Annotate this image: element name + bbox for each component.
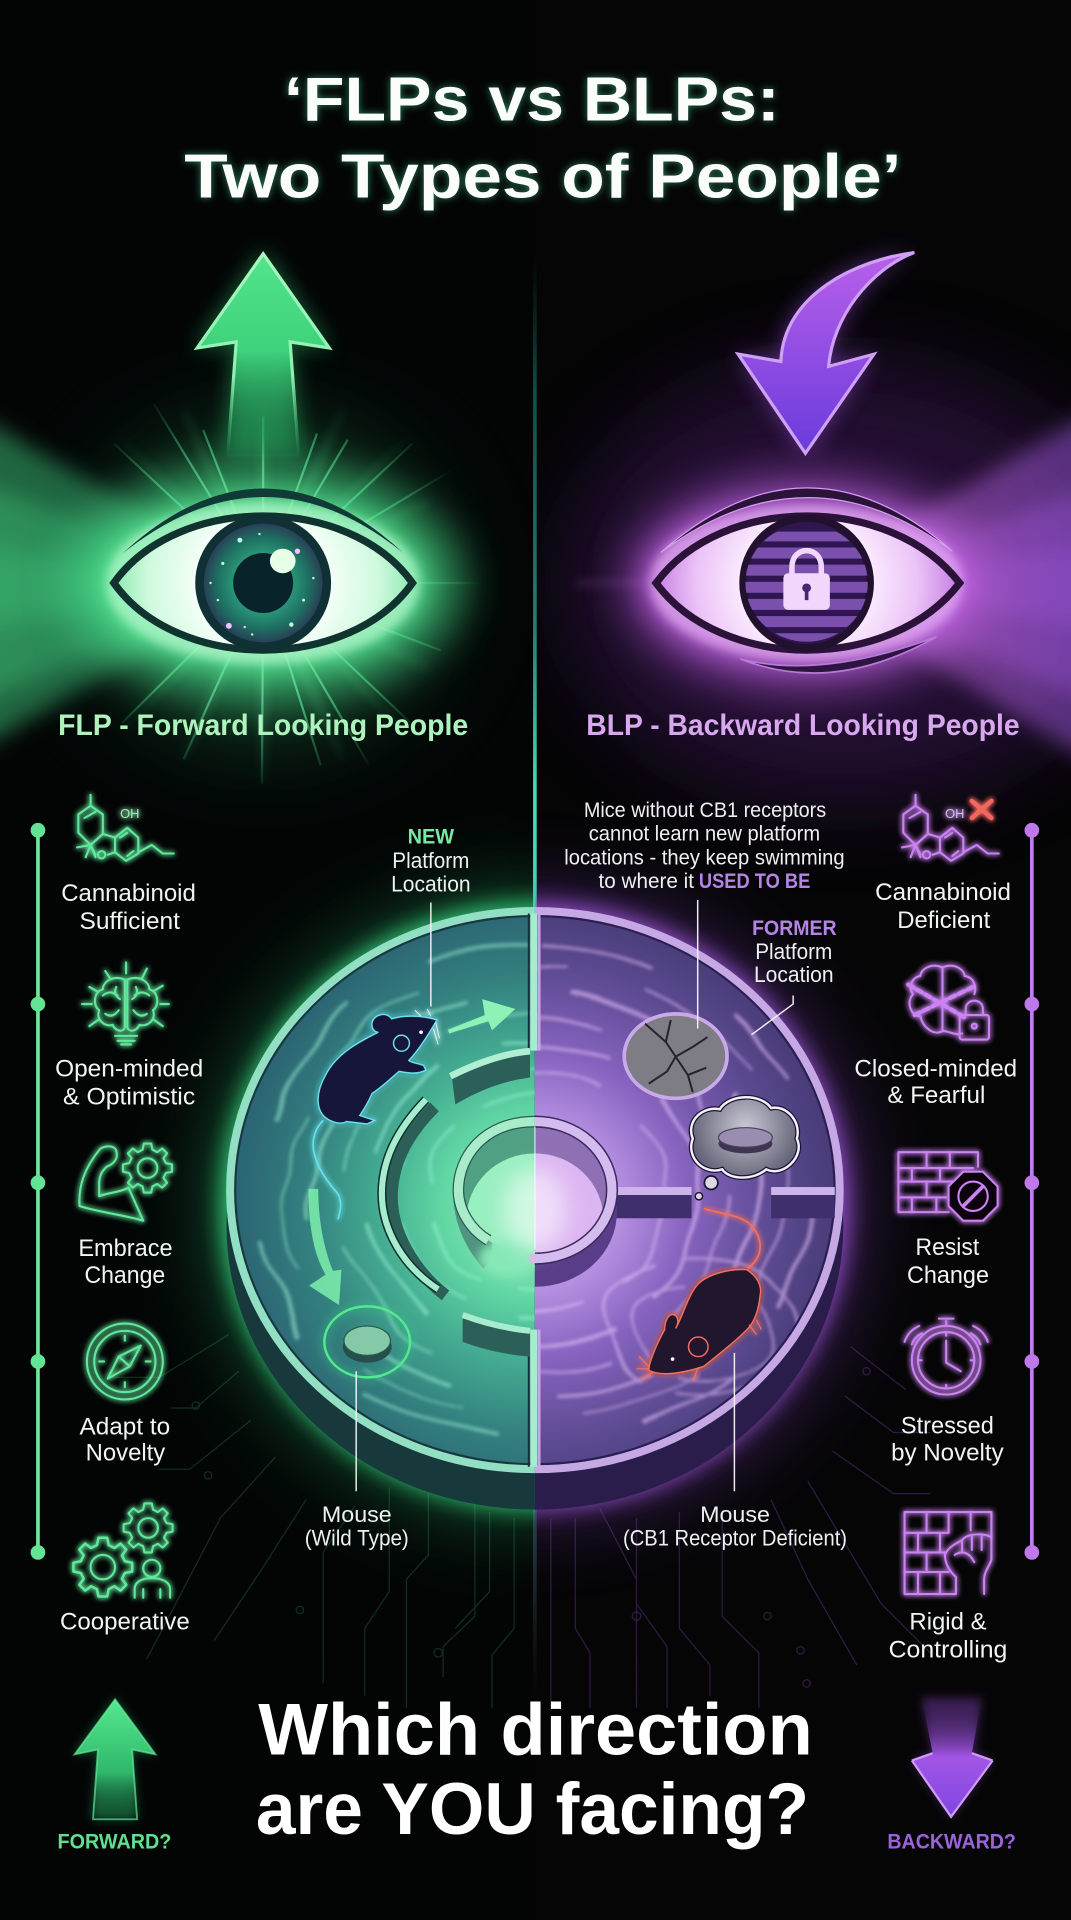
purple curved down arrow — [738, 253, 914, 453]
central ring — [453, 1122, 617, 1287]
center seam walls — [529, 913, 539, 1467]
center divider line — [533, 257, 537, 1920]
bottom question — [256, 1688, 813, 1850]
FLP heading: FLP - Forward Looking People — [58, 709, 468, 742]
former platform label: Location — [754, 962, 834, 987]
purple eye — [656, 488, 960, 673]
right water surface — [534, 915, 834, 1463]
disc base — [226, 1210, 844, 1510]
green path arrow curved — [308, 1189, 341, 1305]
icon: gears and person — [73, 1503, 173, 1598]
item: Open-minded & Optimistic: & Optimistic — [63, 1083, 195, 1110]
item: Rigid & Controlling — [889, 1609, 1007, 1664]
item: Rigid & Controlling: Rigid & — [909, 1609, 987, 1636]
left timeline rail — [31, 823, 45, 1560]
right timeline rail — [1024, 823, 1039, 1560]
BLP heading: BLP - Backward Looking People — [586, 709, 1020, 742]
thought cloud — [691, 1097, 799, 1200]
item: Cannabinoid Sufficient: Cannabinoid — [61, 880, 196, 907]
eye white — [656, 516, 960, 650]
former platform cracked — [624, 1014, 727, 1098]
rim right — [534, 907, 844, 1474]
icon: cannabinoid molecule green: OH — [120, 806, 139, 821]
water maze disc — [214, 898, 856, 1514]
icon: brick wall with stop sign — [898, 1152, 998, 1221]
leader lines — [356, 900, 793, 1491]
explanatory callout: to where it — [599, 869, 694, 893]
icon: wall with fist — [905, 1512, 991, 1594]
title: ‘FLPs vs BLPs: — [284, 64, 780, 134]
lower lid arc — [741, 637, 936, 673]
background — [92, 330, 1071, 836]
right maze wall — [612, 1187, 835, 1218]
title: Two Types of People’ — [184, 141, 901, 211]
bottom question: Which direction — [258, 1688, 813, 1770]
CB1 deficient mouse label — [623, 1502, 847, 1551]
new platform — [324, 1306, 410, 1377]
left maze wall bottom — [463, 1315, 530, 1357]
eyebrow — [122, 488, 403, 554]
ring floor — [468, 1153, 602, 1254]
lock — [783, 551, 830, 610]
icon: cannabinoid molecule purple with X: OH — [945, 806, 964, 821]
title — [184, 64, 901, 211]
item: Stressed by Novelty — [891, 1413, 1004, 1467]
left mouse — [313, 1009, 439, 1219]
item: Closed-minded & Fearful: Closed-minded — [854, 1055, 1017, 1082]
new platform label: Location — [391, 871, 471, 896]
CB1 deficient mouse label: (CB1 Receptor Deficient) — [623, 1526, 847, 1551]
iris stars — [209, 533, 315, 636]
wild type mouse label: Mouse — [322, 1502, 392, 1527]
disc outer glow — [214, 898, 856, 1514]
wild type mouse label — [305, 1502, 409, 1551]
pupil — [233, 553, 293, 613]
center highlight — [503, 1168, 567, 1251]
right rim — [534, 1116, 618, 1265]
item: Resist Change: Change — [907, 1262, 989, 1289]
CB1 deficient mouse label: Mouse — [700, 1502, 770, 1527]
item: Cannabinoid Sufficient: Sufficient — [80, 908, 180, 935]
icon: cannabinoid molecule purple with X — [902, 795, 999, 861]
iris stripes — [741, 532, 875, 642]
new platform label: NEW — [408, 825, 455, 849]
water ripples — [256, 943, 814, 1445]
item: Closed-minded & Fearful: & Fearful — [887, 1082, 985, 1109]
item: Embrace Change — [78, 1235, 173, 1289]
left water surface — [236, 910, 535, 1463]
green eye — [114, 488, 412, 650]
highlight — [270, 549, 296, 573]
item: Embrace Change: Embrace — [78, 1235, 173, 1262]
explanatory callout: cannot learn new platform — [589, 822, 820, 846]
item: Adapt to Novelty — [80, 1413, 170, 1467]
green light beams and starburst — [0, 387, 526, 784]
circuit traces green — [110, 1335, 514, 1708]
item: Resist Change: Resist — [916, 1234, 979, 1261]
item: Closed-minded & Fearful — [854, 1055, 1017, 1109]
explanatory callout: Mice without CB1 receptors — [584, 798, 826, 822]
green path arrow top — [448, 999, 515, 1033]
ring outer walls — [534, 1205, 617, 1287]
eyebrow — [661, 488, 952, 552]
left maze wall arc — [382, 1100, 446, 1295]
former platform label — [752, 916, 837, 987]
item: Stressed by Novelty: Stressed — [901, 1413, 994, 1440]
item: Cannabinoid Deficient — [875, 879, 1011, 934]
item: Adapt to Novelty: Adapt to — [80, 1413, 170, 1440]
eye white — [114, 516, 412, 650]
explanatory callout: locations - they keep swimming — [564, 846, 845, 870]
item: Cooperative: Cooperative — [60, 1609, 190, 1636]
item: Open-minded & Optimistic — [55, 1055, 203, 1110]
rim left — [226, 907, 535, 1474]
FORWARD label: FORWARD? — [58, 1831, 171, 1854]
BACKWARD label: BACKWARD? — [887, 1831, 1016, 1854]
icon: chained brain with lock — [908, 966, 989, 1040]
icon: stopwatch — [905, 1319, 988, 1395]
circuit traces purple — [551, 1347, 930, 1708]
item: Cannabinoid Sufficient — [61, 880, 196, 935]
item: Cannabinoid Deficient: Cannabinoid — [875, 879, 1011, 906]
item: Rigid & Controlling: Controlling — [889, 1637, 1007, 1664]
bottom question: are YOU facing? — [256, 1768, 809, 1850]
icon: cannabinoid molecule green — [77, 795, 174, 861]
iris — [743, 518, 870, 648]
iris — [200, 519, 327, 647]
item: Adapt to Novelty: Novelty — [86, 1440, 166, 1467]
new platform label: Platform — [392, 848, 469, 873]
former platform label: FORMER — [752, 916, 837, 940]
new platform label — [391, 825, 471, 896]
left maze wall top — [450, 1051, 530, 1104]
item: Resist Change — [907, 1234, 989, 1289]
wild type mouse label: (Wild Type) — [305, 1526, 409, 1551]
left rim — [458, 1122, 535, 1240]
ring inner walls — [464, 1127, 534, 1207]
purple light beams — [575, 380, 1071, 796]
item: Embrace Change: Change — [84, 1262, 165, 1289]
item: Cannabinoid Deficient: Deficient — [897, 907, 990, 934]
item: Open-minded & Optimistic: Open-minded — [55, 1055, 203, 1082]
icon: brain with rays — [82, 962, 169, 1044]
right mouse — [636, 1208, 761, 1381]
left opening floor — [479, 1240, 537, 1277]
icon: compass — [87, 1324, 163, 1399]
former platform label: Platform — [755, 939, 832, 964]
backward small arrow — [912, 1698, 993, 1818]
explanatory callout: USED TO BE — [699, 869, 810, 893]
icon: arm and gear — [79, 1144, 172, 1221]
seam light — [534, 1126, 536, 1249]
item: Stressed by Novelty: by Novelty — [891, 1440, 1004, 1467]
explanatory callout — [564, 798, 845, 893]
green up arrow — [195, 251, 330, 456]
forward small arrow — [73, 1698, 155, 1819]
